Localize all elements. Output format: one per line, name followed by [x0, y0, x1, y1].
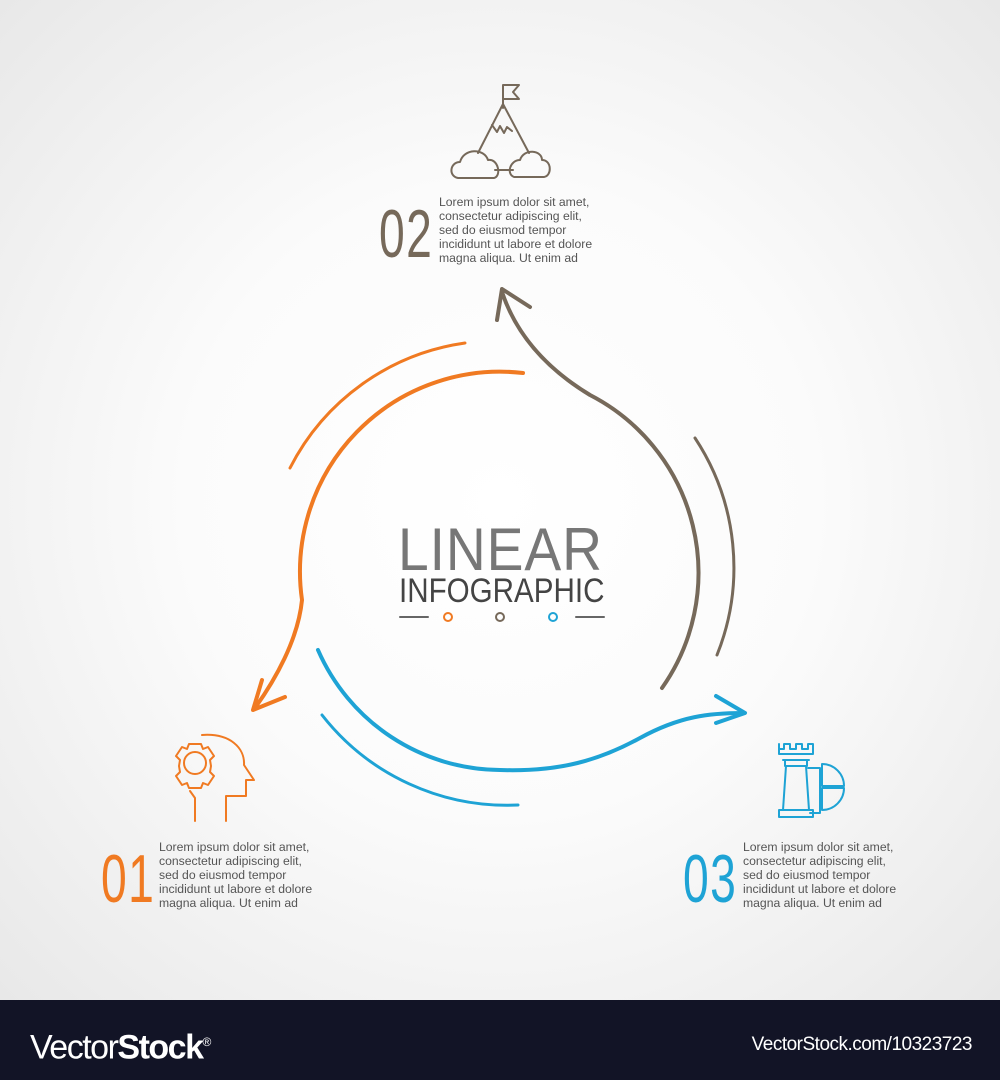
step 02 text [439, 195, 592, 265]
step 02 text: consectetur adipiscing elit, [439, 209, 582, 223]
step 03 text: magna aliqua. Ut enim ad [743, 896, 882, 910]
step 02 text: Lorem ipsum dolor sit amet, [439, 195, 589, 209]
step 02 text: magna aliqua. Ut enim ad [439, 251, 578, 265]
step 03 text: incididunt ut labore et dolore [743, 882, 896, 896]
step 01 text: sed do eiusmod tempor [159, 868, 286, 882]
step 01 text: Lorem ipsum dolor sit amet, [159, 840, 309, 854]
arrow: brown cycle segment [497, 289, 734, 688]
footer logo: VectorStock® [30, 1028, 210, 1066]
step 01 number: 01 [101, 841, 155, 917]
arrow: orange cycle segment [253, 343, 523, 710]
step 03 text: Lorem ipsum dolor sit amet, [743, 840, 893, 854]
title: LINEAR: LINEAR [398, 516, 603, 583]
icon: chess rook with pie [779, 744, 844, 817]
icon: mountain with flag [451, 85, 550, 178]
arrow: blue cycle segment [318, 650, 745, 805]
footer url: VectorStock.com/10323723 [752, 1034, 972, 1055]
step 01 text: magna aliqua. Ut enim ad [159, 896, 298, 910]
step 01 text [159, 840, 312, 910]
step 01 text: consectetur adipiscing elit, [159, 854, 302, 868]
step 03 text: consectetur adipiscing elit, [743, 854, 886, 868]
title: INFOGRAPHIC: INFOGRAPHIC [399, 572, 604, 610]
decoration: center dots [400, 613, 604, 621]
icon: head with gear [176, 735, 254, 821]
step 03 text [743, 840, 896, 910]
footer bar [0, 1000, 1000, 1080]
step 03 text: sed do eiusmod tempor [743, 868, 870, 882]
step 01 text: incididunt ut labore et dolore [159, 882, 312, 896]
step 02 text: sed do eiusmod tempor [439, 223, 566, 237]
step 02 text: incididunt ut labore et dolore [439, 237, 592, 251]
step 02 number: 02 [379, 196, 433, 272]
step 03 number: 03 [683, 841, 737, 917]
